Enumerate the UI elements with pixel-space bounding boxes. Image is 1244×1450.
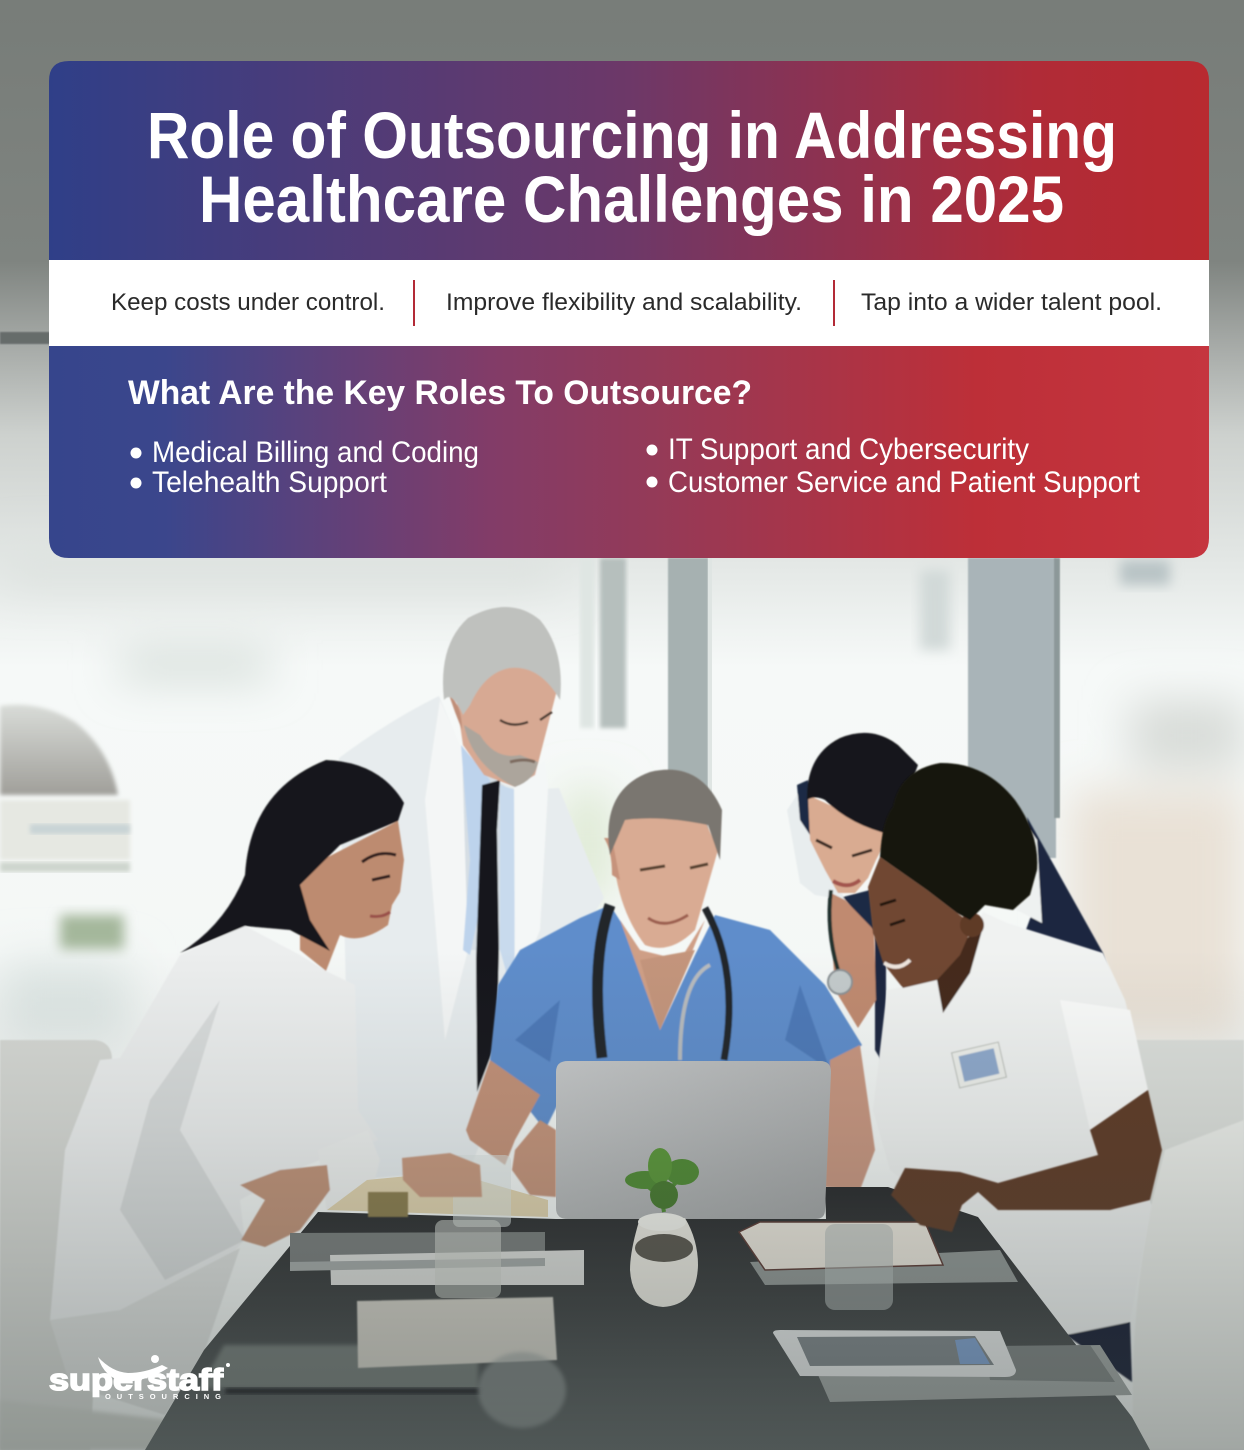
navy trousers bbox=[1066, 1322, 1132, 1382]
chairs bbox=[0, 1040, 1244, 1450]
arm bbox=[829, 892, 876, 1028]
logo: superstaff outsourcing: superstaff bbox=[49, 1362, 224, 1397]
list: left roles: Medical Billing and Coding bbox=[152, 436, 479, 469]
laptop bbox=[556, 1061, 831, 1219]
neck bbox=[937, 927, 983, 1013]
title: Healthcare Challenges in 2025 bbox=[199, 162, 1064, 236]
notebook left bbox=[200, 1345, 478, 1390]
glasses bbox=[453, 1155, 511, 1227]
hair bbox=[807, 733, 918, 835]
person: left woman with dark hair bbox=[50, 760, 404, 1415]
white coat bbox=[787, 780, 845, 900]
list: left roles bbox=[130, 436, 479, 499]
heading: key roles: What Are the Key Roles To Outsource? bbox=[128, 374, 752, 412]
benefit: flexibility: Improve flexibility and scalability. bbox=[446, 289, 802, 316]
photo shading overlay bbox=[0, 950, 1244, 1450]
hair bbox=[880, 763, 1037, 920]
panel: benefits strip bbox=[49, 260, 1209, 346]
hair bbox=[180, 760, 404, 953]
tablet bbox=[290, 1232, 545, 1267]
head bbox=[612, 810, 718, 948]
list: right roles: Customer Service and Patient Support bbox=[668, 466, 1141, 499]
title: Role of Outsourcing in Addressing bbox=[147, 98, 1117, 172]
list: left roles: Telehealth Support bbox=[152, 466, 388, 499]
tablets lower right bbox=[807, 1345, 1132, 1402]
benefit: costs: Keep costs under control. bbox=[111, 289, 385, 316]
shirt bbox=[461, 745, 490, 955]
neck and face bbox=[300, 821, 404, 971]
title bbox=[147, 98, 1117, 236]
benefit: talent: Tap into a wider talent pool. bbox=[861, 289, 1162, 316]
tie bbox=[476, 780, 500, 1092]
lapel bbox=[514, 760, 548, 990]
list: right roles bbox=[646, 433, 1141, 499]
panel: key roles bbox=[49, 346, 1209, 558]
hand bbox=[240, 1165, 330, 1247]
header panel bbox=[49, 61, 1209, 261]
notebook right bbox=[750, 1250, 1018, 1285]
logo: superstaff outsourcing bbox=[49, 1355, 230, 1401]
panel: title gradient band bbox=[49, 61, 1209, 261]
stethoscope bbox=[830, 890, 838, 970]
head bbox=[455, 660, 557, 787]
face bbox=[868, 857, 973, 988]
plant in a glass pot bbox=[625, 1148, 699, 1307]
face bbox=[808, 795, 890, 893]
hands on the table bbox=[402, 1090, 1162, 1232]
person: center man in blue scrubs bbox=[466, 770, 875, 1190]
name badge bbox=[952, 1042, 1006, 1088]
navy scrub back bbox=[1000, 817, 1130, 1050]
uniform bbox=[873, 912, 1152, 1338]
person: standing man with grey hair bbox=[339, 607, 604, 1180]
meeting table with papers and tablets bbox=[145, 1155, 1150, 1450]
stethoscope bbox=[598, 905, 610, 1058]
coat bbox=[50, 926, 378, 1380]
coat bbox=[339, 696, 604, 1180]
logo: superstaff outsourcing: OUTSOURCING bbox=[105, 1392, 221, 1401]
person: back woman in navy bbox=[787, 733, 1130, 1068]
clipboard bbox=[327, 1172, 548, 1217]
list: right roles: IT Support and Cybersecurity bbox=[668, 433, 1029, 466]
person: right woman with curly hair bbox=[868, 763, 1152, 1382]
